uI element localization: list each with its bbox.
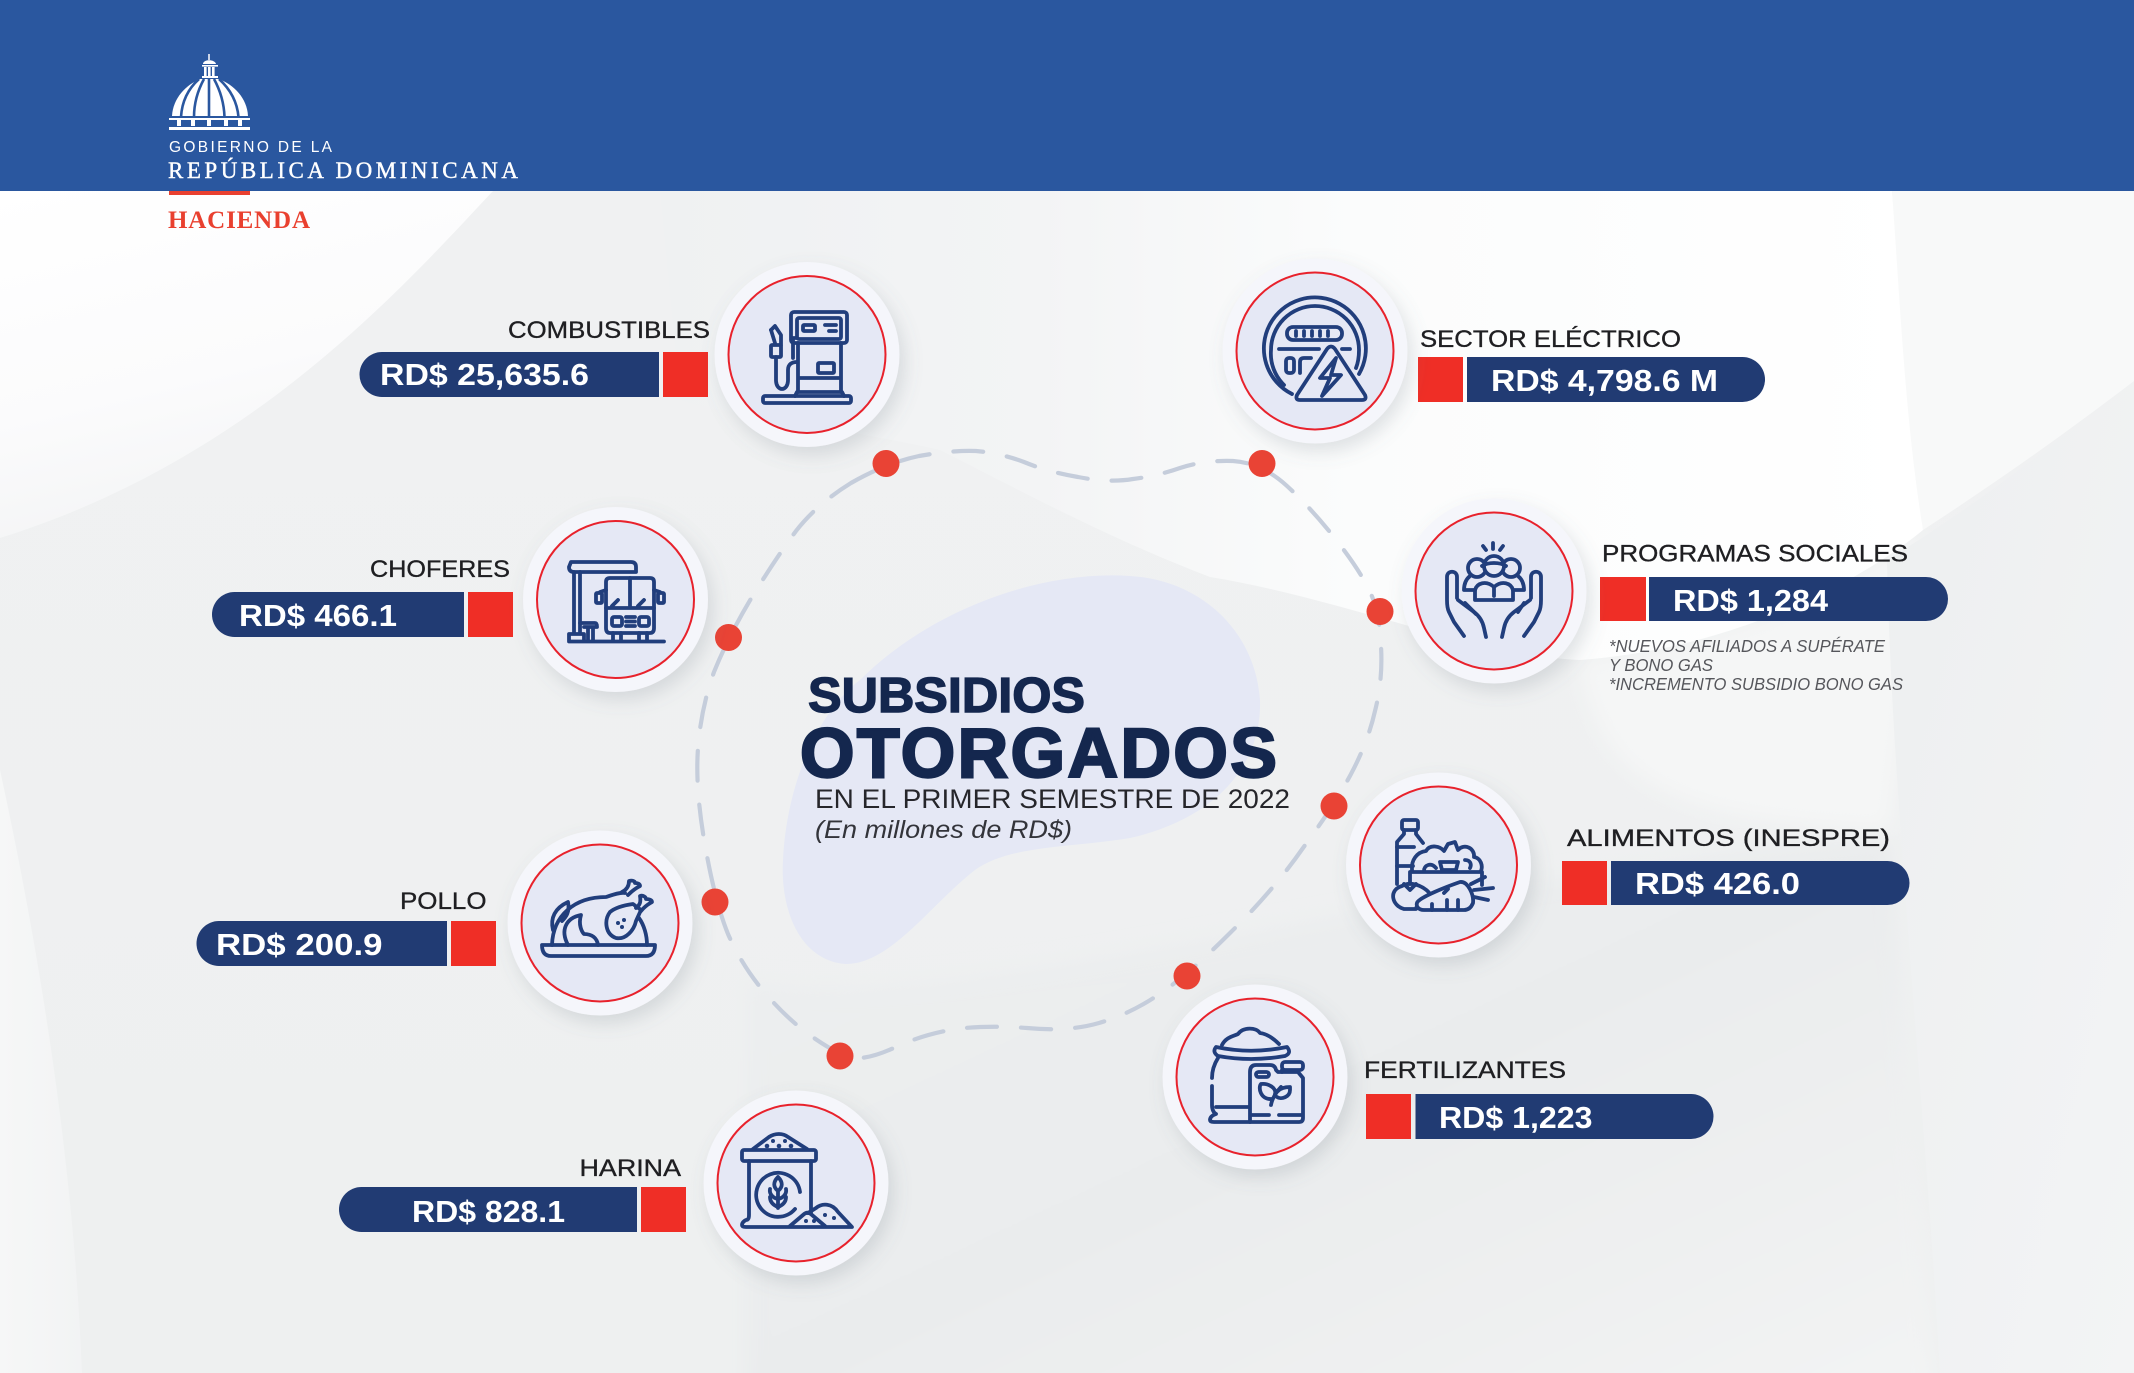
label: CHOFERES (370, 556, 510, 583)
value bar: RD$ 466.1 (239, 598, 397, 633)
icon: fertilizer sack and bottle (1210, 1029, 1303, 1122)
value bar: RD$ 4,798.6 M (1491, 363, 1718, 398)
value bar (1562, 861, 1910, 905)
text: hacienda: HACIENDA (168, 207, 310, 234)
circle badge (523, 507, 708, 692)
circle badge (1162, 984, 1348, 1170)
subheading: EN EL PRIMER SEMESTRE DE 2022 (815, 784, 1290, 814)
text: república dominicana: REPÚBLICA DOMINICANA (168, 157, 518, 183)
icon: fuel pump (763, 312, 851, 403)
value bar (1600, 577, 1948, 621)
icon: bus stop (569, 562, 664, 642)
value bar (1418, 357, 1765, 402)
circle badge (1222, 258, 1408, 444)
icon: capitol dome (169, 54, 250, 130)
label: ALIMENTOS (INESPRE) (1567, 825, 1890, 852)
dashed ring (697, 451, 1381, 1058)
label: SECTOR ELÉCTRICO (1420, 326, 1681, 353)
value bar (360, 352, 708, 397)
value bar: RD$ 1,223 (1439, 1100, 1592, 1135)
panel: sector eléctrico (1222, 258, 1765, 444)
footnotes (1609, 636, 1903, 694)
value bar (196, 921, 496, 966)
panel: harina (339, 1090, 889, 1276)
value bar (1366, 1094, 1714, 1139)
footnotes: Y BONO GAS (1609, 655, 1713, 675)
text: gobierno de la: GOBIERNO DE LA (169, 139, 333, 156)
value bar (212, 592, 513, 637)
icon: roast chicken (542, 881, 655, 956)
panel: pollo (196, 830, 692, 1016)
footnotes: *INCREMENTO SUBSIDIO BONO GAS (1609, 674, 1903, 694)
label: COMBUSTIBLES (508, 317, 710, 344)
value bar: RD$ 828.1 (412, 1194, 565, 1229)
panel: programas sociales (1402, 498, 1948, 694)
logo: gobierno de la república dominicana, hacienda (168, 54, 518, 234)
circle badge (508, 830, 692, 1016)
footnotes: *NUEVOS AFILIADOS A SUPÉRATE (1609, 636, 1885, 656)
label: POLLO (400, 888, 486, 915)
panel: alimentos (1346, 772, 1910, 958)
ring markers (702, 450, 1394, 1070)
label: HARINA (580, 1155, 682, 1182)
circle badge (1402, 498, 1586, 684)
value bar (339, 1187, 686, 1232)
panel: combustibles (360, 262, 900, 447)
title block (800, 669, 1290, 844)
icon: hands holding people (1447, 543, 1541, 637)
circle badge (714, 262, 900, 447)
heading: subsidios: SUBSIDIOS (808, 669, 1085, 723)
circle badge (1346, 772, 1531, 958)
panel: choferes (212, 507, 708, 692)
label: FERTILIZANTES (1364, 1057, 1566, 1084)
panel: fertilizantes (1162, 984, 1714, 1170)
unit note: (En millones de RD$) (815, 816, 1072, 844)
icon: electric meter with warning (1264, 297, 1366, 400)
central blob (783, 575, 1260, 964)
value bar: RD$ 25,635.6 (380, 357, 589, 392)
label: PROGRAMAS SOCIALES (1602, 540, 1908, 568)
heading: otorgados: OTORGADOS (800, 714, 1277, 792)
red divider (169, 191, 250, 195)
icon: food basket (1393, 820, 1493, 910)
header band (0, 0, 2134, 191)
value bar: RD$ 426.0 (1635, 866, 1800, 901)
icon: flour sack (742, 1134, 852, 1227)
value bar: RD$ 200.9 (216, 927, 382, 962)
value bar: RD$ 1,284 (1673, 583, 1829, 618)
circle badge (704, 1090, 888, 1276)
